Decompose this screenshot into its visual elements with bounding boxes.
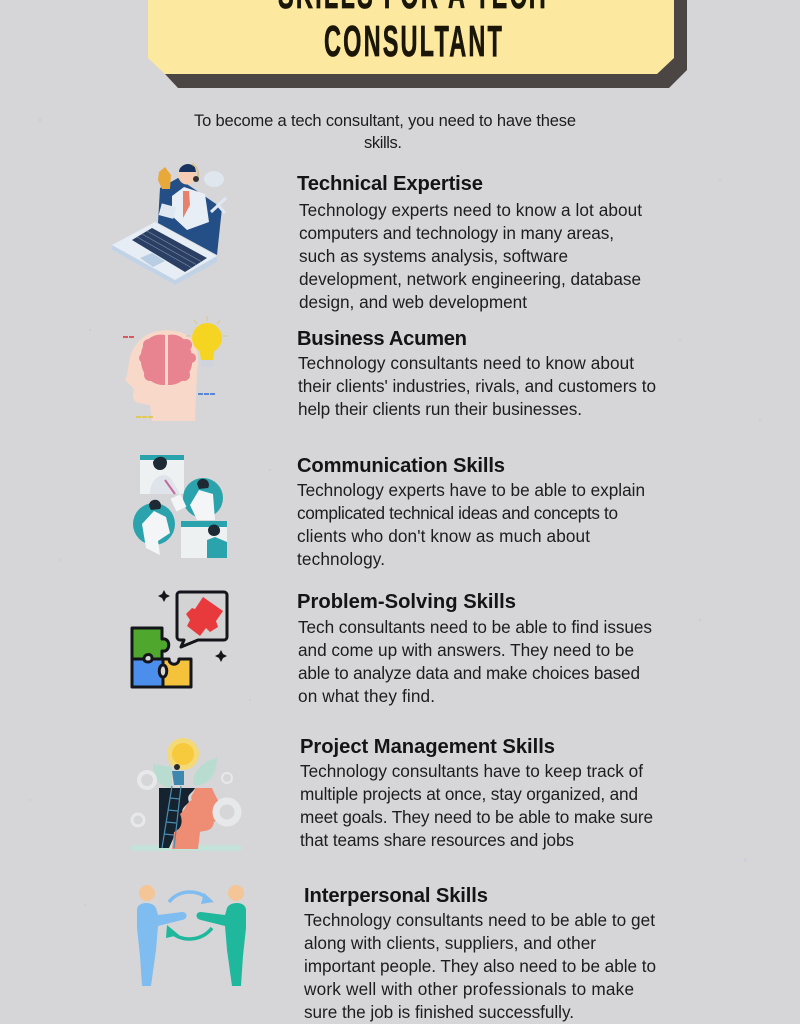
heading: Business Acumen — [297, 328, 467, 350]
text block: help their clients run their businesses. — [298, 399, 582, 419]
text block: such as systems analysis, software — [299, 246, 568, 266]
text block: meet goals. They need to be able to make sure — [300, 807, 653, 827]
icon: two people exchanging — [137, 885, 246, 986]
text block: able to analyze data and make choices based — [298, 663, 640, 683]
text block: development, network engineering, database — [299, 269, 641, 289]
title — [278, 0, 548, 66]
title: CONSULTANT — [324, 17, 504, 66]
text block: clients who don't know as much about — [297, 526, 590, 546]
heading: Problem-Solving Skills — [297, 591, 516, 613]
text block: Tech consultants need to be able to find issues — [298, 617, 652, 637]
icon: head with ladder and bulb — [130, 738, 242, 851]
text block: Technology experts have to be able to explain — [297, 480, 645, 500]
text block — [298, 353, 656, 419]
panel: problem-solving skills — [132, 590, 227, 687]
text block: that teams share resources and jobs — [300, 830, 574, 850]
text block: and come up with answers. They need to be — [298, 640, 634, 660]
icon: laptop with consultant — [112, 164, 226, 285]
text block: on what they find. — [298, 686, 435, 706]
panel: communication skills — [133, 455, 645, 569]
text block — [299, 200, 642, 312]
text block: work well with other professionals to make — [303, 979, 634, 999]
text block: complicated technical ideas and concepts to — [297, 503, 618, 523]
text block: design, and web development — [299, 292, 527, 312]
text block: along with clients, suppliers, and other — [304, 933, 596, 953]
text block: Technology consultants have to keep track of — [300, 761, 643, 781]
icon: jigsaw puzzle — [132, 592, 227, 687]
heading: Technical Expertise — [297, 173, 483, 195]
text block — [303, 910, 656, 1022]
intro text: skills. — [364, 134, 402, 152]
title banner — [148, 0, 687, 88]
text block — [300, 761, 653, 850]
panel: business acumen — [123, 316, 656, 421]
panel: interpersonal skills — [137, 885, 656, 1022]
text block: Technology consultants need to be able to get — [304, 910, 655, 930]
panel: technical expertise — [112, 164, 642, 312]
text block: multiple projects at once, stay organized, and — [300, 784, 638, 804]
icon: people communicating — [133, 455, 227, 558]
heading: Interpersonal Skills — [304, 885, 488, 907]
icon: head with brain and light bulb — [123, 316, 228, 421]
heading: Communication Skills — [297, 455, 505, 477]
intro text: To become a tech consultant, you need to have these — [194, 112, 576, 130]
intro text — [194, 112, 576, 152]
text block — [298, 617, 652, 706]
text block: Technology experts need to know a lot about — [299, 200, 642, 220]
text block: sure the job is finished successfully. — [304, 1002, 574, 1022]
text block: their clients' industries, rivals, and customers to — [298, 376, 656, 396]
text block: Technology consultants need to know about — [298, 353, 634, 373]
text block — [297, 480, 645, 569]
heading: Project Management Skills — [300, 736, 555, 758]
text block: computers and technology in many areas, — [299, 223, 614, 243]
text block: important people. They also need to be able to — [304, 956, 656, 976]
text block: technology. — [297, 549, 385, 569]
panel: project management skills — [130, 736, 653, 851]
